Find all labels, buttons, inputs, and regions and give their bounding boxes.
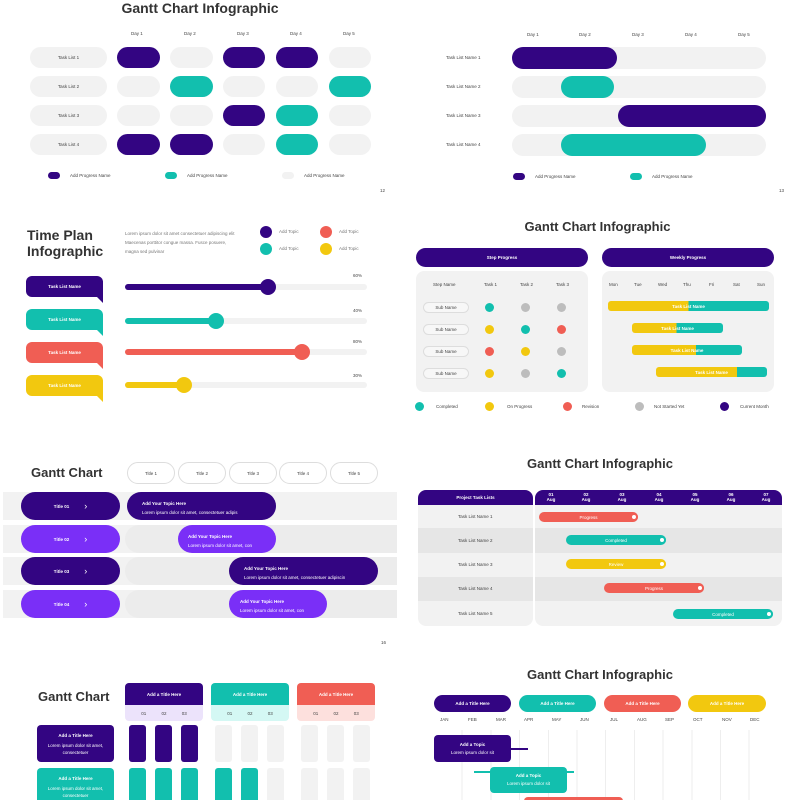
legend: Completed <box>436 404 458 409</box>
row cards: Lorem ipsum dolor sit amet, <box>48 786 103 790</box>
months: FEB <box>468 717 477 722</box>
legend: Current Month <box>740 404 769 409</box>
title: Gantt Chart <box>38 689 110 704</box>
title: Infographic <box>27 243 103 259</box>
day labels <box>527 32 750 37</box>
panel: weekly progress <box>602 248 774 392</box>
progress tracks <box>125 273 367 393</box>
row cards: Lorem ipsum dolor sit amet, <box>48 742 103 748</box>
legend: Revision <box>582 404 599 409</box>
rows: › <box>84 566 87 576</box>
panel: weekly progress: Mon <box>609 282 618 287</box>
progress tracks: 80% <box>353 339 362 344</box>
timeline chart: Aug <box>691 497 699 502</box>
panel: weekly progress: Task List Name <box>672 304 705 308</box>
header pills: Add a Title Here <box>540 701 575 706</box>
topic icons legend: Add Topic <box>279 229 299 234</box>
months <box>440 717 760 722</box>
timeline chart: Progress <box>645 586 663 590</box>
left table: Task List Name 1 <box>458 514 493 519</box>
timeline chart: Aug <box>727 497 735 502</box>
panel: weekly progress: Task List Name <box>661 326 694 330</box>
panel: step progress: Sub Name <box>435 349 457 354</box>
slide 1: gantt chart grid <box>30 0 385 193</box>
panel: weekly progress: Wed <box>658 282 667 287</box>
column headers: 01 02 03 <box>141 710 187 716</box>
column headers: 01 02 03 <box>227 710 273 716</box>
topic icons legend: Add Topic <box>279 246 299 251</box>
rows: Add Your Topic Here <box>240 599 284 604</box>
rows: Lorem ipsum dolor sit amet, consectetuer adipis <box>142 510 238 515</box>
title pills: Title 4 <box>297 470 309 476</box>
timeline chart: Aug <box>547 497 555 502</box>
panel: weekly progress: Task List Name <box>695 370 728 374</box>
timeline chart: Completed <box>605 538 627 542</box>
day labels: Day 4 <box>290 31 302 36</box>
panel: step progress: Step Name <box>433 282 456 287</box>
task bubbles: Task List Name <box>48 350 81 355</box>
legend <box>513 173 693 180</box>
title: Time Plan <box>27 227 93 243</box>
grid rows: Task List 3 <box>58 113 79 118</box>
slide 6: project task lists gantt <box>418 456 782 626</box>
header pills <box>434 695 766 712</box>
task bubbles: Task List Name <box>48 383 81 388</box>
grid and topics: Add a Topic <box>460 742 485 746</box>
months: JAN <box>440 717 449 722</box>
panel: step progress: Sub Name <box>435 305 457 310</box>
column bars <box>129 725 370 800</box>
slide 5: gantt chart topics: 16 <box>381 640 386 645</box>
months: DEC <box>750 717 760 722</box>
panel: weekly progress: Fri <box>709 282 714 287</box>
panel: weekly progress: Tue <box>634 282 642 287</box>
legend: Add Progress Name <box>304 173 345 178</box>
left table: Project Task Lists <box>456 495 495 500</box>
panel: weekly progress: Sat <box>733 282 740 287</box>
progress tracks: 30% <box>353 373 362 378</box>
rows: › <box>84 599 87 609</box>
title: Gantt Chart <box>31 465 102 480</box>
left table: Task List Name 3 <box>458 562 493 567</box>
column headers: Add a Title Here <box>233 692 267 696</box>
slide 3: time plan <box>26 226 367 402</box>
rows <box>3 492 397 618</box>
legend: Add Progress Name <box>535 174 576 179</box>
slide 7: gantt chart columns <box>37 683 375 800</box>
task bubbles: Task List Name <box>48 284 81 289</box>
rows: Add Your Topic Here <box>244 566 288 571</box>
day labels <box>131 31 355 36</box>
timeline chart <box>535 490 782 626</box>
panel: weekly progress: Thu <box>683 282 691 287</box>
panel: step progress: Sub Name <box>435 371 457 376</box>
row cards: consectetuer <box>63 750 88 754</box>
left table: Task List Name 2 <box>458 538 493 543</box>
timeline chart: 05 <box>692 492 698 497</box>
title pills: Title 2 <box>196 470 208 476</box>
panel: step progress: Step Progress <box>487 255 517 260</box>
rows: Lorem ipsum dolor sit amet, consectetuer adipiscin <box>244 575 345 580</box>
timeline chart: Completed <box>712 612 734 616</box>
panel: step progress: Sub Name <box>435 327 457 332</box>
task bubbles: Task List Name <box>48 317 81 322</box>
grid and topics: Add a Topic <box>516 773 541 778</box>
row cards <box>37 725 114 800</box>
task bubbles <box>26 276 103 402</box>
day labels: Day 2 <box>579 32 591 37</box>
day labels: Day 4 <box>685 32 697 37</box>
title: Gantt Chart Infographic <box>121 0 279 16</box>
day labels: Day 3 <box>237 31 249 36</box>
day labels: Day 2 <box>184 31 196 36</box>
task rows: Task List Name 4 <box>446 142 481 147</box>
panel: step progress <box>416 248 588 392</box>
rows: Title 01 <box>54 504 69 508</box>
months: JUL <box>610 717 618 722</box>
timeline chart: Aug <box>762 497 770 502</box>
timeline chart: Aug <box>582 497 590 502</box>
grid and topics: Lorem ipsum dolor sit <box>507 781 550 786</box>
rows: › <box>84 534 87 544</box>
legend: Add Progress Name <box>187 173 228 178</box>
header pills: Add a Title Here <box>710 701 744 706</box>
timeline chart: Review <box>609 562 623 566</box>
description: Lorem ipsum dolor sit amet consectetuer adipiscing elit Maecenas porttitor congue massa. Fusce posuere, magna sed pulvinar <box>125 231 235 254</box>
slide 2: gantt bars <box>446 32 784 193</box>
title: Gantt Chart Infographic <box>525 218 670 234</box>
title pills <box>127 462 378 484</box>
legend <box>415 402 769 411</box>
day labels: Day 1 <box>527 32 539 37</box>
title pills: Title 1 <box>145 470 157 476</box>
task rows: Task List Name 3 <box>446 113 481 118</box>
grid rows: Task List 2 <box>58 84 79 89</box>
panel: weekly progress: Task List Name <box>671 348 703 352</box>
row cards: Add a Title Here <box>58 732 93 738</box>
legend: Add Progress Name <box>70 173 111 178</box>
slide 4: step & weekly progress <box>415 218 774 411</box>
slide 8: monthly gantt <box>434 666 766 800</box>
title pills: Title 5 <box>348 470 360 476</box>
topic icons legend: Add Topic <box>339 229 359 234</box>
grid and topics <box>434 730 750 800</box>
legend <box>48 172 345 179</box>
column headers: Add a Title Here <box>319 692 353 696</box>
rows: Lorem ipsum dolor sit amet, con <box>240 608 304 613</box>
months: NOV <box>722 717 732 722</box>
grid rows: Task List 4 <box>58 142 79 147</box>
title <box>27 227 103 259</box>
column headers <box>125 683 375 721</box>
task rows <box>446 47 766 156</box>
rows: Title 02 <box>54 536 69 542</box>
left table: Task List Name 5 <box>458 611 493 616</box>
topic icons legend: Add Topic <box>339 246 359 251</box>
timeline chart: 01 <box>548 492 554 497</box>
task rows: Task List Name 2 <box>446 84 481 89</box>
day labels: Day 5 <box>738 32 750 37</box>
legend: On Progress <box>507 404 532 409</box>
progress tracks: 60% <box>353 273 362 278</box>
column headers: Add a Title Here <box>147 692 181 696</box>
rows: Title 04 <box>54 602 69 606</box>
timeline chart: 02 <box>583 492 588 497</box>
column headers: 01 02 03 <box>313 710 359 716</box>
timeline chart: 07 <box>763 492 768 497</box>
panel: step progress: Task 2 <box>520 282 533 287</box>
task rows: Task List Name 1 <box>446 55 481 60</box>
timeline chart: Progress <box>579 514 598 520</box>
panel: weekly progress: Weekly Progress <box>670 255 706 260</box>
topic icons legend <box>260 226 359 255</box>
rows: Add Your Topic Here <box>188 534 232 539</box>
timeline chart: 03 <box>619 492 624 497</box>
panel: step progress: Task 1 <box>484 282 497 287</box>
slide 5: gantt chart topics <box>3 462 397 645</box>
grid and topics: Lorem ipsum dolor sit <box>451 750 494 754</box>
rows: › <box>84 501 87 511</box>
timeline chart: Aug <box>618 497 626 502</box>
progress tracks: 40% <box>353 308 362 313</box>
left table <box>418 490 533 626</box>
day labels: Day 5 <box>343 31 355 36</box>
slide 1: gantt chart grid: 12 <box>380 188 385 193</box>
title: Gantt Chart Infographic <box>527 456 673 470</box>
months: MAR <box>496 717 506 722</box>
months: AUG <box>637 717 647 722</box>
day labels: Day 3 <box>632 32 644 37</box>
day labels: Day 1 <box>131 31 143 36</box>
title: Gantt Chart Infographic <box>527 666 673 682</box>
rows: Add Your Topic Here <box>142 501 186 506</box>
months: JUN <box>580 717 589 722</box>
slide 2: gantt bars: 13 <box>779 188 784 193</box>
left table: Task List Name 4 <box>458 586 493 591</box>
months: APR <box>524 717 533 722</box>
panel: weekly progress: Sun <box>757 282 765 287</box>
months: SEP <box>665 717 674 722</box>
legend: Not Started Yet <box>654 404 684 409</box>
months: OCT <box>693 717 702 722</box>
header pills: Add a Title Here <box>455 701 490 706</box>
header pills: Add a Title Here <box>625 701 660 706</box>
months: MAY <box>552 717 561 722</box>
title pills: Title 3 <box>247 470 259 476</box>
panel: step progress: Task 3 <box>556 282 569 287</box>
rows: Lorem ipsum dolor sit amet, con <box>188 543 252 548</box>
row cards: Add a Title Here <box>58 776 93 780</box>
grid rows <box>30 47 371 155</box>
rows: Title 03 <box>54 568 69 574</box>
legend: Add Progress Name <box>652 174 693 179</box>
timeline chart: 04 <box>656 492 662 497</box>
timeline chart: 06 <box>728 492 734 497</box>
grid rows: Task List 1 <box>58 55 79 60</box>
timeline chart: Aug <box>655 497 663 502</box>
row cards: consectetuer <box>63 792 88 798</box>
